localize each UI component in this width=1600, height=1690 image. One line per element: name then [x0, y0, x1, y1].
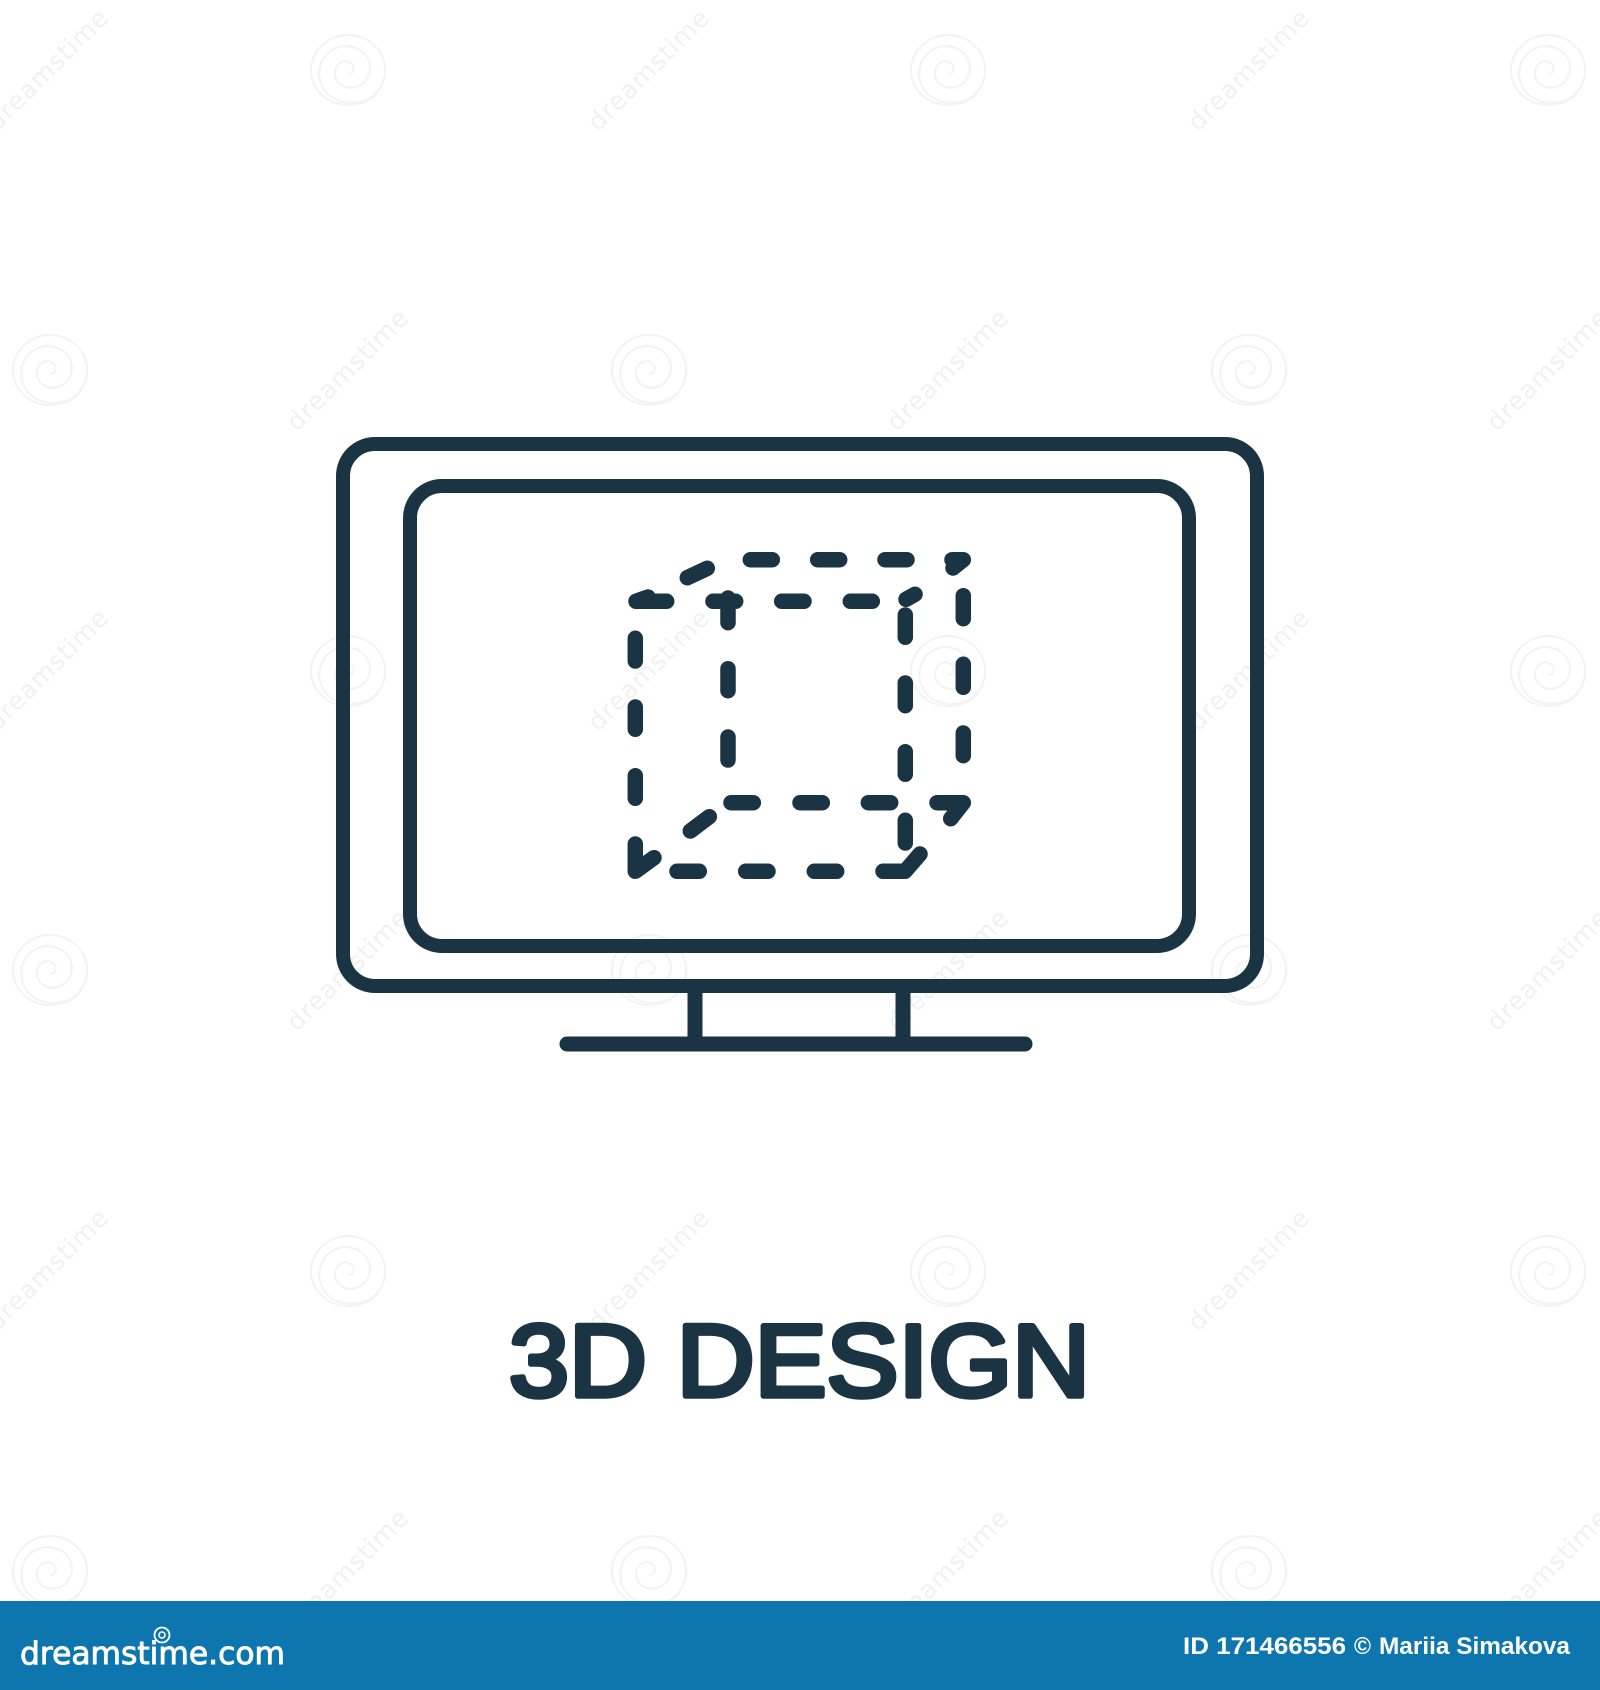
image id and credit	[1183, 1633, 1571, 1660]
dreamstime logo: dreamstime.com	[20, 1636, 285, 1672]
footer bar	[0, 1601, 1600, 1690]
monitor stand	[567, 993, 1025, 1044]
title: 3D DESIGN	[509, 1304, 1090, 1418]
monitor screen	[410, 486, 1189, 946]
dashed cube	[635, 560, 963, 871]
image id and credit: ID 171466556	[1183, 1633, 1346, 1660]
image id and credit: Mariia Simakova	[1379, 1633, 1571, 1660]
image id and credit: ©	[1354, 1633, 1371, 1660]
monitor outer frame	[343, 444, 1257, 986]
icon: monitor with dashed cube	[343, 444, 1257, 1044]
